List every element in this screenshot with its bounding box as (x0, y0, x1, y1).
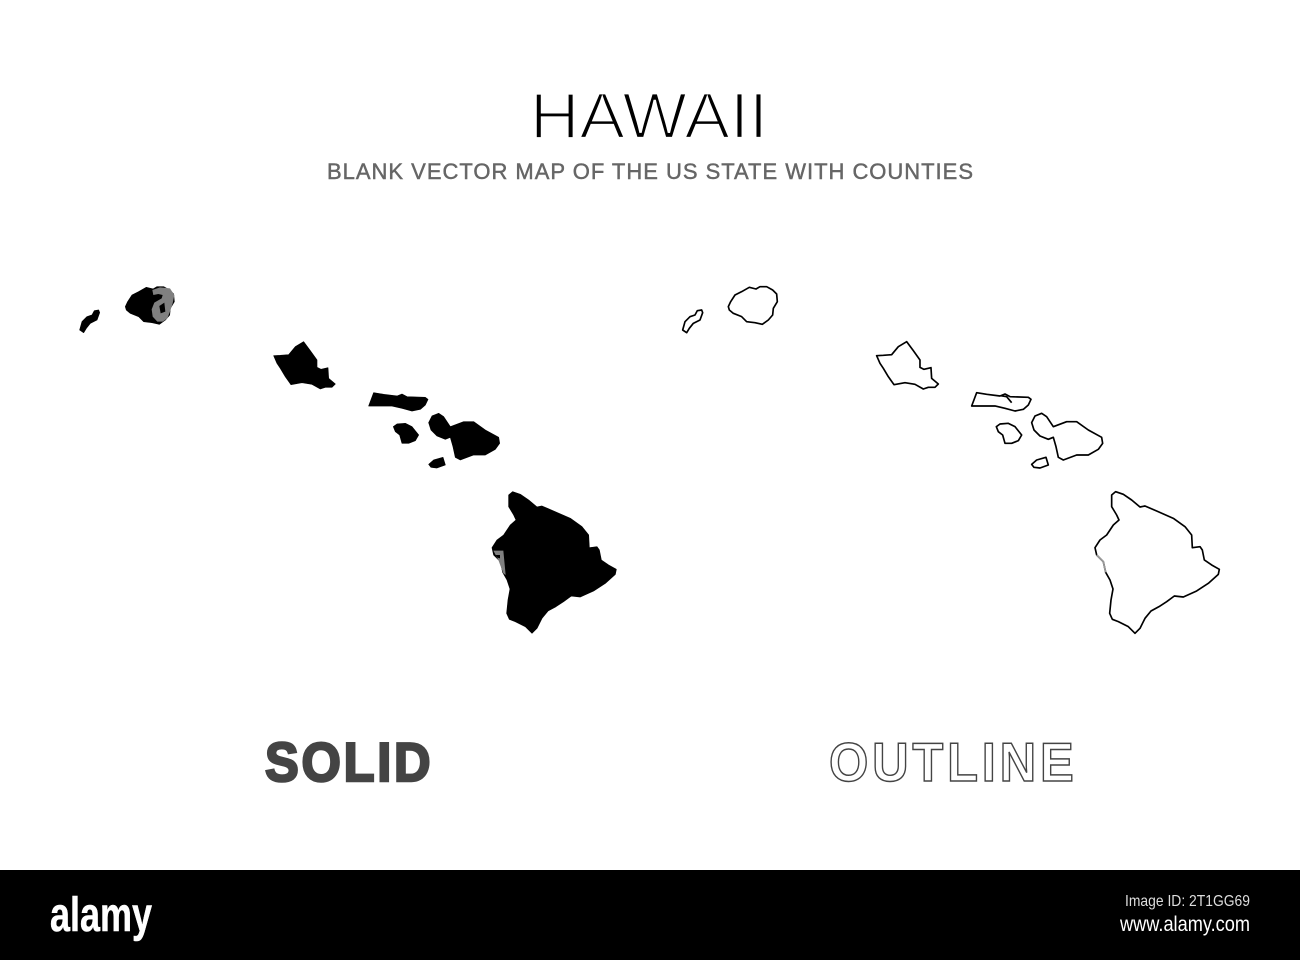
title: HAWAII (530, 79, 768, 152)
footer logo: alamy (50, 889, 152, 942)
website: www.alamy.com (1119, 913, 1250, 936)
faded outline segment (1097, 555, 1106, 572)
gray patch on Big Island (493, 551, 506, 575)
solid map of Hawaii (80, 287, 616, 633)
gray patch on Kauai (152, 287, 174, 322)
outline map of Hawaii (683, 287, 1219, 633)
label: outline: OUTLINE (829, 732, 1074, 793)
Molokai inner line (1001, 396, 1012, 403)
image id: Image ID: 2T1GG69 (1125, 893, 1250, 910)
subtitle: BLANK VECTOR MAP OF THE US STATE WITH COUNTIES (327, 159, 973, 184)
label: solid: SOLID (265, 732, 431, 793)
footer bar (0, 870, 1300, 960)
